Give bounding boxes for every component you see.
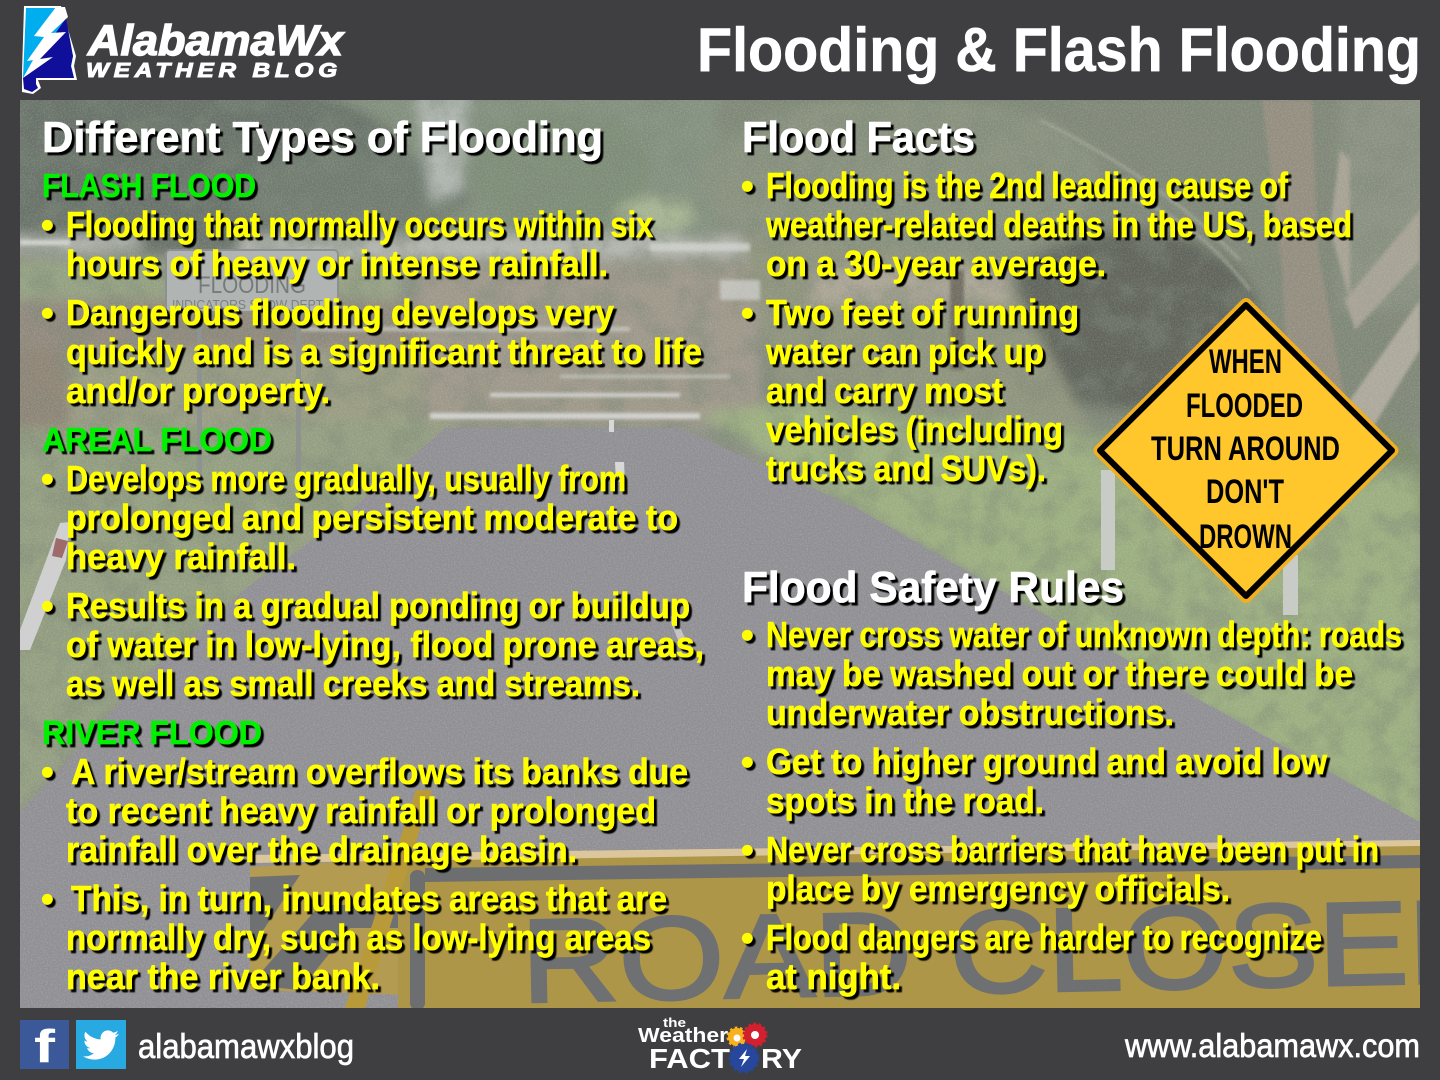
bullets: areal flood: Results in a gradual ponding or buildup <box>66 585 690 626</box>
gear: lightning <box>730 1044 758 1072</box>
subheading: river flood: RIVER FLOOD <box>42 714 262 751</box>
bullets: areal flood: of water in low-lying, flood prone areas, <box>66 624 704 665</box>
bullets: flash flood: quickly and is a significant threat to life <box>66 331 702 372</box>
bullets: flood facts: • <box>741 165 754 206</box>
bullets: areal flood: as well as small creeks and streams. <box>66 663 640 704</box>
bullets: flood facts: water can pick up <box>765 331 1044 372</box>
bullets: areal flood: heavy rainfall. <box>66 536 296 577</box>
bullets: river flood: This, in turn, inundates areas that are <box>71 878 667 919</box>
photo: road <box>20 428 1420 1008</box>
website url: www.alabamawx.com <box>1124 1027 1420 1064</box>
bullets: areal flood: prolonged and persistent moderate to <box>66 497 678 538</box>
bullets: river flood: near the river bank. <box>66 956 380 997</box>
icon: warning sign <box>1100 304 1392 597</box>
logo: the weather factory: FACT <box>649 1043 730 1074</box>
sign text: FLOODED <box>1186 387 1303 425</box>
sign text <box>1151 343 1340 556</box>
photo: foliage mottling <box>20 100 1420 840</box>
gear: snow <box>744 1024 766 1046</box>
bullets: flood safety rules: underwater obstructions. <box>766 692 1174 733</box>
bullets: flash flood: Flooding that normally occurs within six <box>66 204 653 245</box>
bullets: flood facts: on a 30-year average. <box>766 243 1106 284</box>
bullets: river flood: to recent heavy rainfall or prolonged <box>66 790 656 831</box>
bullets: flash flood: hours of heavy or intense rainfall. <box>66 243 608 284</box>
icon: facebook <box>20 1020 69 1072</box>
bullets: flash flood: • <box>41 292 54 333</box>
photo: white roadside post <box>20 522 70 650</box>
logo: the weather factory: Weather <box>638 1025 728 1047</box>
bullets: flood safety rules: may be washed out or there could be <box>766 653 1353 694</box>
photo: road closed barrier <box>250 790 1440 1028</box>
bullets: flood facts: • <box>741 292 754 333</box>
bullets: areal flood <box>41 458 704 704</box>
bullets: flood safety rules: Flood dangers are harder to recognize <box>766 917 1322 958</box>
bullets: river flood: normally dry, such as low-lying areas <box>66 917 651 958</box>
subheading: areal flood: AREAL FLOOD <box>42 421 272 458</box>
bullets: flood safety rules: at night. <box>766 956 901 997</box>
panel: different types of flooding <box>41 113 704 997</box>
sign text: DON'T <box>1206 473 1284 511</box>
bullets: flash flood: Dangerous flooding develops very <box>66 292 614 333</box>
panel: flood facts <box>741 113 1352 489</box>
photo: road closed barrier: ROAD CLOSED <box>520 875 1440 1028</box>
bullets: flash flood <box>41 204 702 411</box>
bullets: flood safety rules: place by emergency officials. <box>766 868 1230 909</box>
photo: tree trunks <box>950 100 1420 440</box>
logo: the weather factory <box>638 1015 802 1074</box>
sign text: DROWN <box>1199 518 1292 556</box>
bullets: areal flood: • <box>41 585 54 626</box>
photo: road dashes <box>609 420 688 645</box>
photo: roadside flood sign <box>166 250 338 475</box>
bullets: flood facts: and carry most <box>766 370 1003 411</box>
icon: twitter <box>76 1020 126 1069</box>
bullets: flash flood: • <box>41 204 54 245</box>
sign text: TURN AROUND <box>1151 430 1340 468</box>
bullets: river flood: rainfall over the drainage basin. <box>66 829 577 870</box>
bullets: flash flood: and/or property. <box>66 370 330 411</box>
wordmark subtitle: WEATHER BLOG <box>86 60 342 82</box>
photo: trees and flood water <box>20 100 1420 822</box>
bullets: river flood: A river/stream overflows its banks due <box>71 751 688 792</box>
bullets: flood safety rules: • <box>741 614 754 655</box>
logo: the weather factory: the <box>663 1015 686 1030</box>
bullets: flood safety rules: • <box>741 741 754 782</box>
logo: AlabamaWx wordmark <box>86 17 345 82</box>
heading: different types of flooding: Different Types of Flooding <box>42 113 603 162</box>
heading: flood facts: Flood Facts <box>742 113 975 162</box>
photo: roadside flood sign: FLOODING <box>198 272 306 299</box>
bullets: river flood <box>41 751 688 997</box>
bullets: river flood: • <box>41 878 54 919</box>
bullets: flood facts: weather-related deaths in the US, based <box>765 204 1352 245</box>
panel: flood safety rules <box>741 563 1402 997</box>
sign diamond <box>1100 304 1392 597</box>
photo: roadside flood sign: INDICATORS SHOW DEPTH <box>172 297 332 312</box>
heading: flood safety rules: Flood Safety Rules <box>742 563 1124 612</box>
logo: the weather factory: RY <box>761 1043 802 1074</box>
photo: asphalt grain <box>20 428 1420 1008</box>
sign text: WHEN <box>1209 343 1282 381</box>
photo: flood water streaks <box>20 240 760 419</box>
bullets: flood facts: vehicles (including <box>766 409 1063 450</box>
subheading: flash flood: FLASH FLOOD <box>42 167 256 204</box>
bullets: flood facts: trucks and SUVs). <box>766 448 1046 489</box>
bullets: flood safety rules: • <box>741 829 754 870</box>
icon: facebook: f <box>34 1020 56 1072</box>
logo: AlabamaWx state icon <box>22 6 77 94</box>
bullets: river flood: • <box>41 751 54 792</box>
bullets: flood facts: Flooding is the 2nd leading cause of <box>766 165 1289 206</box>
bullets: areal flood: Develops more gradually, usually from <box>66 458 626 499</box>
bullets: flood safety rules: Get to higher ground and avoid low <box>766 741 1328 782</box>
bullets: flood safety rules: spots in the road. <box>766 780 1044 821</box>
bullets: areal flood: • <box>41 458 54 499</box>
bullets: flood safety rules: • <box>741 917 754 958</box>
bullets: flood safety rules <box>741 614 1402 997</box>
social handle: alabamawxblog <box>138 1028 354 1066</box>
bullets: flood facts: Two feet of running <box>766 292 1079 333</box>
photo: sign posts <box>1101 470 1298 615</box>
gear: sun <box>728 1028 746 1046</box>
bullets: flood facts <box>741 165 1352 489</box>
sign border <box>1100 305 1392 596</box>
wordmark name: AlabamaWx <box>87 17 345 65</box>
